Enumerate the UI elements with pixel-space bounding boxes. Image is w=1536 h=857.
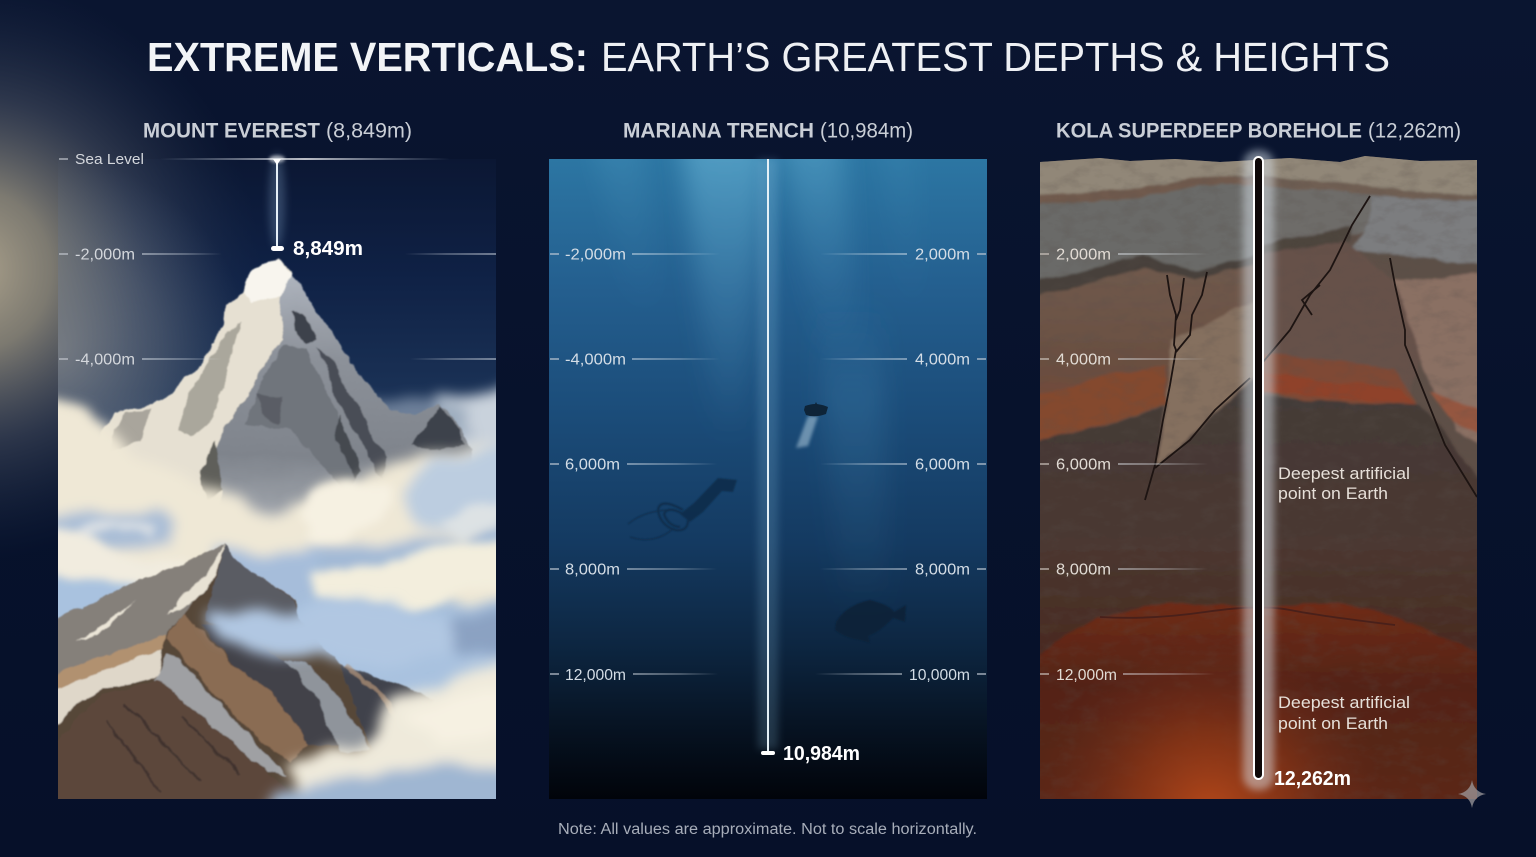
depth marker: Mariana 10,984m: 10,984m <box>783 743 860 765</box>
panel: Kola Superdeep Borehole <box>1040 145 1477 799</box>
scale labels: Mariana left: 8,000m <box>565 562 620 578</box>
heading: Mariana Trench: MARIANA TRENCH <box>623 120 814 142</box>
scale labels: Mariana left: -2,000m <box>565 246 626 264</box>
illustration: cloud wisps <box>40 482 520 615</box>
scale labels: Mariana left: -4,000m <box>565 352 626 368</box>
scale labels: Mariana right: 6,000m <box>915 456 970 474</box>
illustration: molten layer <box>1040 602 1477 799</box>
scale labels: Mariana left: 12,000m <box>565 667 626 684</box>
scale labels: Kola: 8,000m <box>1056 562 1111 578</box>
height marker: Everest 8,849m: 8,849m <box>293 238 363 260</box>
scale labels: Everest: -2,000m <box>75 246 135 264</box>
callout: lower note: Deepest artificial <box>1278 693 1410 712</box>
title <box>147 34 1390 80</box>
illustration: dark deep rock <box>1040 381 1477 656</box>
rock texture <box>1040 150 1477 800</box>
scale labels: Everest <box>59 151 496 368</box>
illustration: fractures <box>1100 196 1477 625</box>
scale labels: Kola: 4,000m <box>1056 352 1111 368</box>
illustration: upper brown strata <box>1040 242 1477 465</box>
heading: Mount Everest: (8,849m) <box>326 120 412 142</box>
borehole <box>1243 150 1274 790</box>
illustration: back clouds <box>58 394 496 614</box>
illustration: squid <box>628 478 737 540</box>
callout: upper note: point on Earth <box>1278 484 1388 503</box>
height marker: Everest 8,849m <box>269 152 363 260</box>
scale labels: Kola: 12,000m <box>1056 667 1117 684</box>
sea level line <box>160 158 450 160</box>
illustration: lower ridge <box>58 543 428 799</box>
title: EARTH’S GREATEST DEPTHS & HEIGHTS <box>601 34 1390 80</box>
scale labels: Mariana right: 4,000m <box>915 352 970 368</box>
callout: upper note <box>1278 464 1410 503</box>
scale labels: Mariana left <box>550 246 720 684</box>
illustration: main summit <box>102 258 472 520</box>
scale labels: Kola <box>1040 246 1215 684</box>
scale labels: Kola: 2,000m <box>1056 246 1111 264</box>
lava glow <box>1072 672 1348 799</box>
heading: Mount Everest: MOUNT EVEREST <box>143 120 320 142</box>
illustration: anglerfish <box>835 600 906 643</box>
left edge atmospheric glow <box>0 0 300 560</box>
scale labels: Everest: Sea Level <box>75 151 144 168</box>
illustration: submersible <box>796 402 828 448</box>
illustration: front clouds <box>198 592 496 799</box>
scale labels: Mariana right: 8,000m <box>915 562 970 578</box>
heading: Kola Superdeep Borehole: KOLA SUPERDEEP BOREHOLE <box>1056 120 1362 142</box>
depth marker: Mariana 10,984m <box>758 159 860 765</box>
illustration: light rays <box>610 159 882 522</box>
depth label: 12,262m: 12,262m <box>1274 768 1351 790</box>
heading: Mount Everest <box>143 120 412 142</box>
scale labels: Mariana right: 2,000m <box>915 246 970 264</box>
scale labels: Kola: 6,000m <box>1056 456 1111 474</box>
heading: Mariana Trench <box>623 120 913 142</box>
scale labels: Mariana right <box>815 246 986 684</box>
scale labels: Mariana left: 6,000m <box>565 456 620 474</box>
icon: corner sparkle <box>1458 780 1486 808</box>
callout: lower note: point on Earth <box>1278 714 1388 733</box>
scale labels: Mariana right: 10,000m <box>909 667 970 684</box>
heading: Kola Superdeep Borehole: (12,262m) <box>1368 120 1461 142</box>
scale labels: Everest: -4,000m <box>75 352 135 368</box>
illustration: surface sediment <box>1040 156 1477 197</box>
callout: lower note <box>1278 693 1410 733</box>
illustration: back haze behind summit <box>58 379 496 458</box>
panel: Mount Everest <box>58 151 496 799</box>
footnote: Note: All values are approximate. Not to scale horizontally. <box>558 821 977 838</box>
callout: upper note: Deepest artificial <box>1278 464 1410 483</box>
illustration: grey upper layer <box>1040 176 1477 294</box>
title: EXTREME VERTICALS: <box>147 34 588 80</box>
heading: Mariana Trench: (10,984m) <box>820 120 913 142</box>
panel: Mariana Trench <box>549 130 987 799</box>
